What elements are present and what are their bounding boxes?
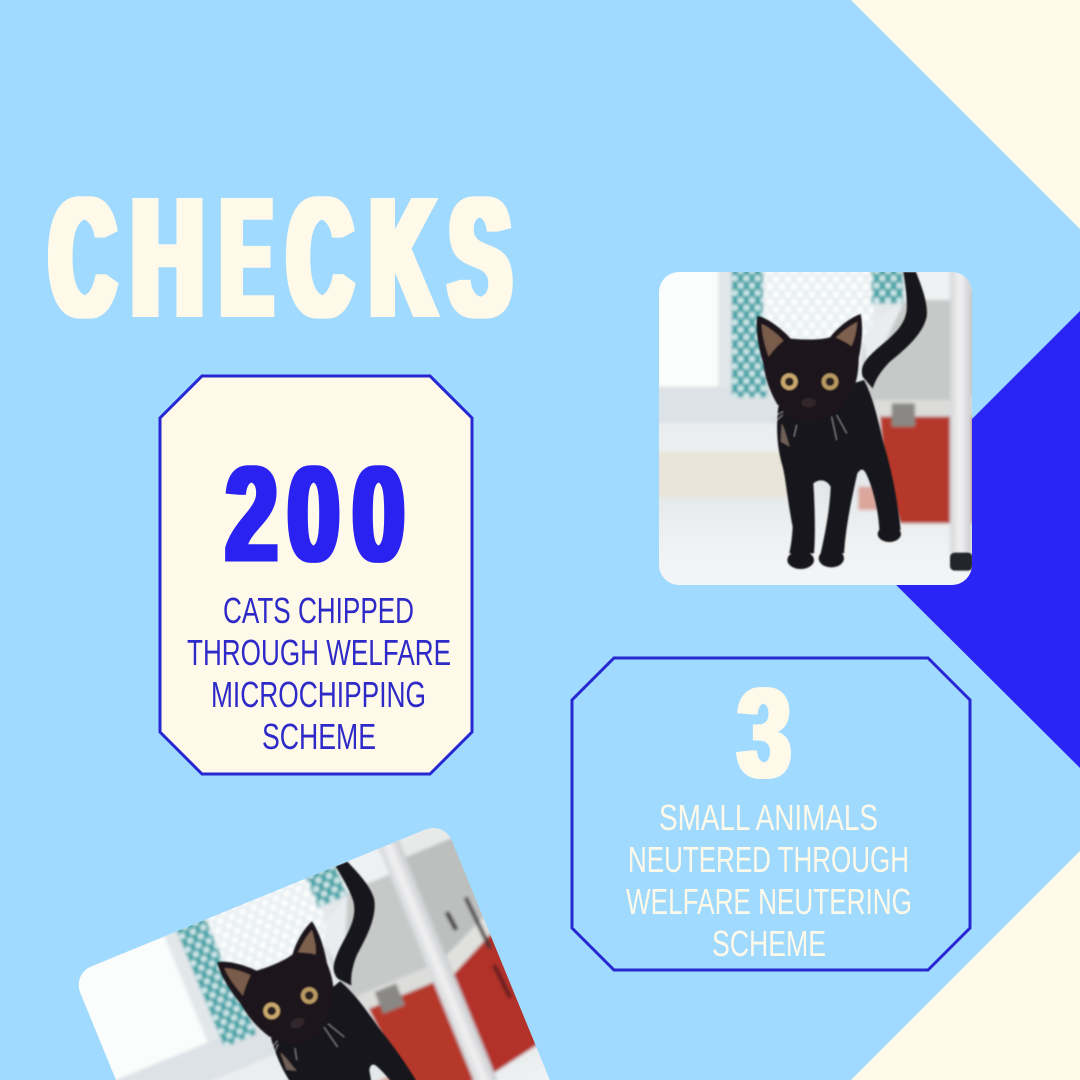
photo: rotated black kitten	[78, 828, 550, 1080]
panel outline	[572, 658, 970, 970]
stat number: 200: 2	[226, 438, 278, 590]
title: K	[370, 162, 434, 352]
stat number: 200: 0	[353, 438, 405, 590]
shape: cream triangle bottom right	[851, 851, 1080, 1080]
stat description: SCHEME	[712, 923, 826, 964]
stat number: 200: 0	[288, 438, 340, 590]
stat description: SMALL ANIMALS	[659, 797, 878, 838]
stat description	[187, 590, 451, 757]
panel: small animals neutered	[572, 658, 970, 970]
title: H	[132, 162, 203, 352]
photo: black kitten	[659, 272, 972, 585]
stat number: 3: 3	[738, 662, 791, 804]
shape: blue diamond right	[851, 311, 1080, 768]
stat description: CATS CHIPPED	[223, 590, 414, 631]
title: C	[288, 162, 352, 352]
stat description: MICROCHIPPING	[211, 674, 426, 715]
title: C	[50, 162, 115, 352]
shape: cream triangle top right	[851, 0, 1080, 229]
title: E	[222, 162, 272, 352]
stat description: THROUGH WELFARE	[187, 632, 451, 673]
stat description	[626, 797, 912, 964]
stat description: NEUTERED THROUGH	[628, 839, 909, 880]
panel outline	[160, 376, 472, 774]
panel: cats chipped	[160, 376, 472, 774]
title: S	[450, 162, 510, 352]
stat description: SCHEME	[262, 716, 376, 757]
stat description: WELFARE NEUTERING	[626, 881, 912, 922]
